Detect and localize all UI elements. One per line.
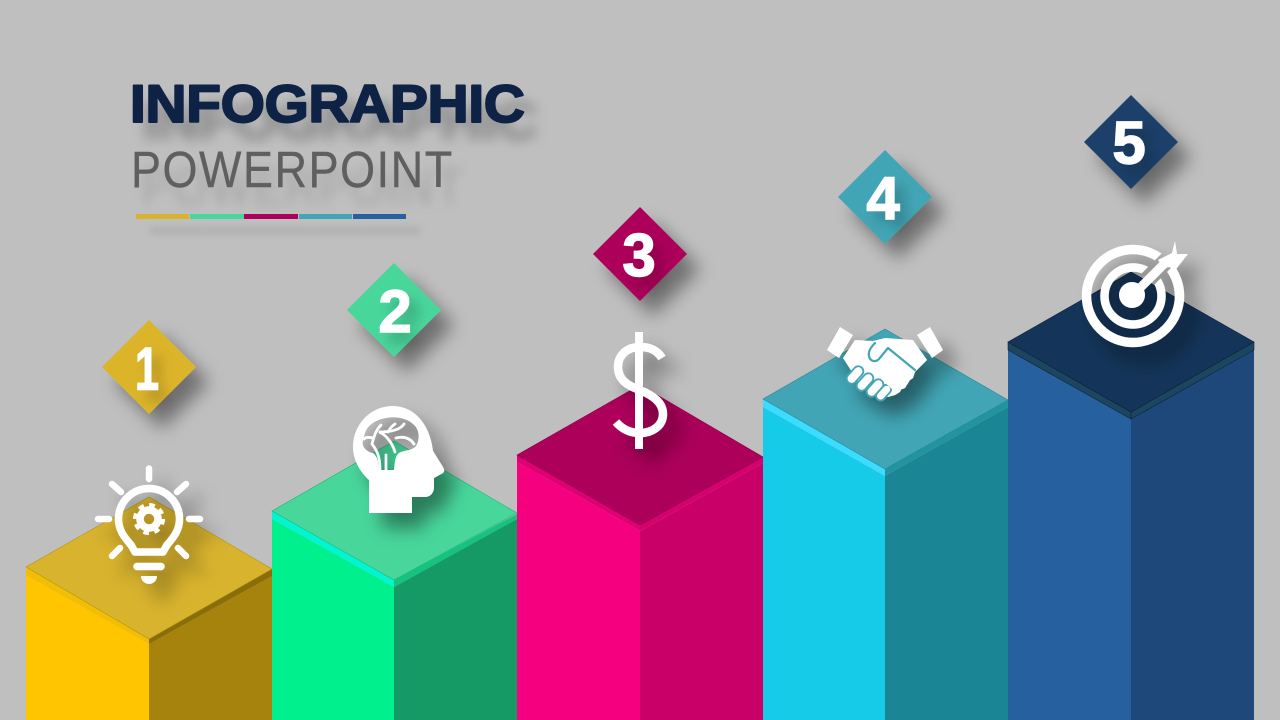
icon: head with brain [353,406,444,513]
badge 3: 3 [622,222,656,289]
bar 5: blue [1008,272,1254,720]
icon: light bulb with gear [98,468,200,584]
badge 3 [593,207,687,301]
badge 2: 2 [378,278,412,345]
bar 2: green [272,441,517,720]
subheading: POWERPOINT: POWERPOINT [131,142,452,199]
icon: dollar sign [616,332,663,449]
bar 1: yellow [26,497,272,720]
badge 4 [838,150,932,244]
title [130,74,525,219]
badge 5 [1084,95,1178,189]
colour strip [136,214,406,219]
badge 1 [102,320,196,414]
icon: handshake [827,327,943,402]
heading: INFOGRAPHIC: INFOGRAPHIC [130,74,525,134]
icon: target with arrow [1086,241,1188,342]
badge 4: 4 [866,165,900,232]
badge 1: 1 [135,336,159,402]
bar 3: magenta [517,385,763,720]
bar 4: cyan [763,329,1008,720]
badge 2 [347,263,441,357]
badge 5: 5 [1112,110,1146,176]
